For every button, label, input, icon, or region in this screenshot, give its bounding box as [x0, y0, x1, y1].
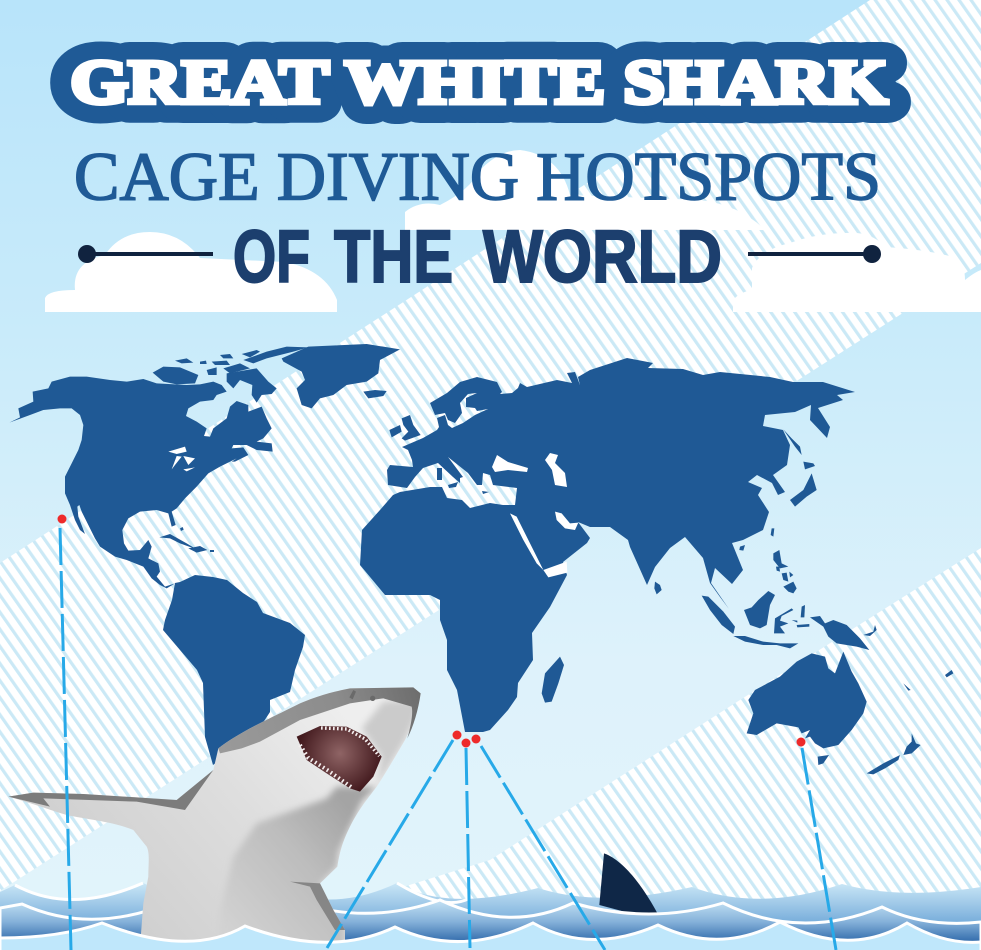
shark dorsal fin	[599, 853, 658, 917]
front wave	[0, 922, 981, 950]
cloud: right	[733, 233, 981, 312]
eye and nostril	[349, 690, 375, 701]
second fin shadow	[290, 882, 345, 930]
right ornament line	[748, 245, 881, 263]
dashed line: south africa east	[481, 746, 605, 950]
mouth	[297, 726, 382, 792]
back wave highlight	[15, 883, 470, 903]
title: great white shark: GREAT WHITE SHARK	[70, 49, 888, 117]
shark body	[8, 687, 421, 947]
south america	[163, 575, 305, 765]
striped diagonal band: lower	[200, 548, 981, 950]
back wave	[0, 883, 981, 950]
cloud: left	[45, 232, 337, 312]
shark belly shading	[218, 700, 421, 947]
australia and nearby islands	[542, 652, 953, 774]
eurasia and africa	[360, 358, 855, 732]
heading: of the world	[233, 215, 722, 298]
heading: of the world: OF	[233, 215, 310, 298]
southeast asian islands	[702, 550, 877, 650]
north america	[9, 377, 273, 588]
great white shark	[8, 687, 421, 947]
heading: cage diving hotspots: CAGE DIVING HOTSPOTS	[74, 138, 881, 214]
cloud: middle	[405, 150, 765, 230]
shark dark back	[218, 687, 421, 753]
mediterranean islands	[437, 468, 489, 494]
dashed line: california	[60, 528, 71, 950]
title: great white shark: GREAT WHITE SHARK	[70, 49, 888, 117]
teeth	[300, 728, 379, 787]
great lakes	[168, 447, 195, 471]
shark pectoral fin dark edge	[8, 770, 213, 810]
heading: of the world: WORLD	[483, 215, 722, 298]
inland seas	[492, 453, 578, 577]
hotspot markers	[58, 514, 806, 748]
dashed line: australia	[802, 748, 836, 950]
middle wave	[0, 900, 981, 950]
dashed line: south africa centre	[466, 748, 470, 948]
left ornament line	[78, 245, 213, 263]
canadian arctic islands and greenland	[153, 344, 421, 553]
heading: of the world: THE	[334, 215, 453, 298]
dashed line: south africa west	[327, 740, 453, 948]
world map	[9, 344, 953, 774]
east asian islands	[654, 429, 817, 594]
